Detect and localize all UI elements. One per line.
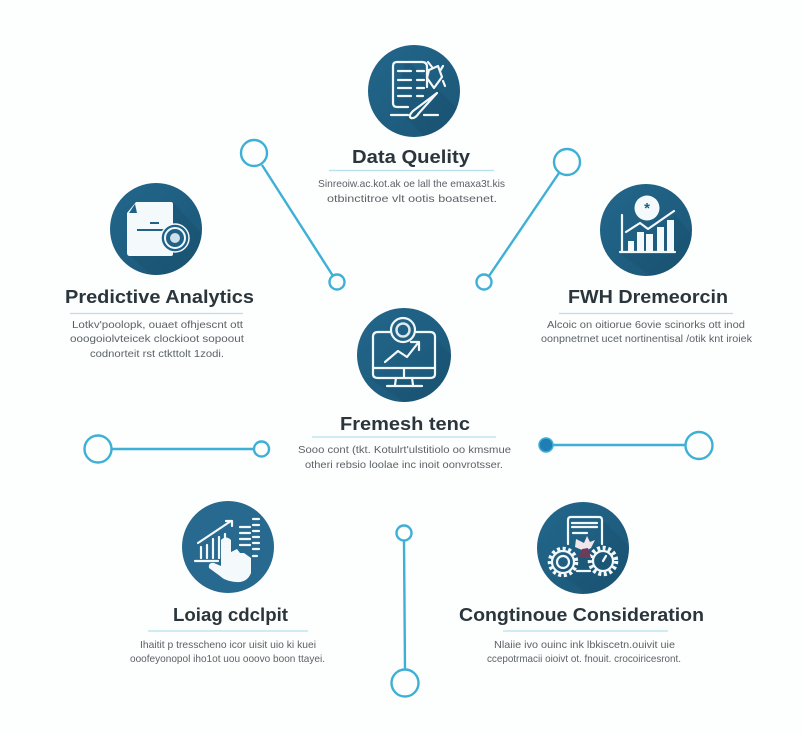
body text: ooogoiolvteicek clockioot sopoout	[70, 333, 244, 345]
body text	[487, 639, 681, 665]
panel: predictive analytics	[65, 183, 254, 360]
body text: Nlaiie ivo ouinc ink lbkiscetn.ouivit uie	[494, 639, 675, 651]
connector: middle right	[539, 432, 712, 459]
heading: Fremesh tenc	[340, 414, 470, 434]
body text: otheri rebsio loolae inc inoit oonvrotsser.	[305, 459, 503, 471]
heading: Loiag cdclpit	[173, 605, 288, 625]
icon: document and gears	[537, 502, 629, 594]
body text: Sinreoiw.ac.kot.ak oe lall the emaxa3t.kis	[318, 178, 505, 190]
body text: Alcoic on oitiorue 6ovie scinorks ott inod	[547, 319, 745, 331]
connector: middle left	[84, 436, 269, 462]
icon: hand and chart	[182, 501, 274, 593]
heading: Predictive Analytics	[65, 287, 254, 307]
body text	[541, 319, 753, 345]
panel: fwh dremeorcin	[541, 184, 753, 345]
panel: congtinoue consideration	[459, 502, 704, 665]
body text	[70, 319, 244, 360]
body text	[298, 444, 511, 471]
heading: FWH Dremeorcin	[568, 287, 728, 307]
body text: Sooo cont (tkt. Kotulrt'ulstitiolo oo kmsmue	[298, 444, 511, 456]
icon: file with badge	[110, 183, 202, 275]
body text: Lotkv'poolopk, ouaet ofhjescnt ott	[72, 319, 243, 331]
panel: fremesh tenc	[298, 308, 511, 471]
panel: data quality	[318, 45, 505, 205]
body text: ooofeyonopol iho1ot uou ooovo boon ttayei.	[130, 653, 325, 665]
heading: Congtinoue Consideration	[459, 605, 704, 625]
body text: oonpnetrnet ucet nortinentisal /otik knt iroiek	[541, 333, 753, 345]
body text: Ihaitit p tresscheno icor uisit uio ki kuei	[140, 639, 316, 651]
body text: otbinctitroe vlt ootis boatsenet.	[327, 193, 497, 205]
panel: loiag cdclpit	[130, 501, 325, 665]
icon: bar chart with trend: *	[644, 200, 650, 217]
icon: monitor with trend	[357, 308, 451, 402]
body text	[318, 178, 505, 205]
body text	[130, 639, 325, 665]
connector: top left	[241, 140, 344, 290]
icon: bar chart with trend	[600, 184, 692, 276]
body text: ccepotrmacii oioivt ot. fnouit. crocoiricesront.	[487, 653, 681, 665]
connector: bottom	[392, 526, 418, 696]
heading: Data Quelity	[352, 147, 470, 167]
connector: top right	[476, 149, 580, 290]
body text: codnorteit rst ctkttolt 1zodi.	[90, 348, 224, 360]
icon: document and pen	[368, 45, 460, 137]
